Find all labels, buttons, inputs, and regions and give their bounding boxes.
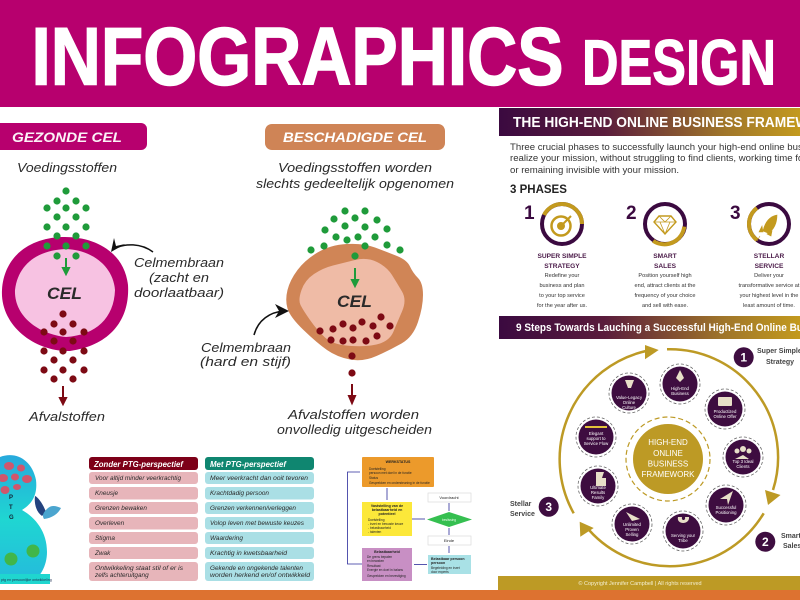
column: with PTG: worden herkend en/of ontwikkeld (210, 572, 310, 579)
cycle arrows (560, 345, 780, 566)
intro paragraph (510, 142, 800, 176)
yellow box: potentieel (379, 512, 395, 516)
center circle: BUSINESS (648, 460, 688, 468)
nine steps: Productized (714, 409, 737, 414)
yellow box: - talenten (368, 530, 382, 534)
phase 1: to your top service (539, 293, 585, 299)
phase 3: SERVICE (755, 263, 784, 270)
column: without PTG: Zwak (94, 550, 111, 557)
yellow box: - belastbaarheid (368, 526, 391, 530)
nine steps: Serving your (671, 533, 696, 538)
column: without PTG: Voor altijd minder veerkrachtig (95, 475, 181, 482)
phase 3: transformative service at (739, 283, 800, 289)
heading: gezonde cel (0, 123, 147, 150)
nine steps: Successful (716, 505, 736, 510)
nine steps: Culture (622, 405, 637, 410)
section header bar 2 (499, 316, 800, 339)
phase 3: Deliver your (754, 273, 784, 279)
orange box: persoon met doel in de functie (369, 471, 412, 475)
column: without PTG: Kneusje (95, 490, 119, 497)
subheading: 3 phases: 3 PHASES (510, 184, 567, 196)
numbered badges: Strategy (766, 359, 794, 366)
blue box: door experts (431, 570, 449, 574)
intro paragraph: or remaining invisible with your mission. (510, 165, 679, 176)
label: cel: CEL (337, 292, 372, 311)
orange box: WERKSTATUS (386, 460, 411, 464)
waste dots (40, 310, 88, 383)
gold footer strip (498, 576, 800, 590)
label: membrane hard: Celmembraan (201, 341, 291, 355)
numbered badges: Stellar (510, 501, 532, 508)
panel: high-end business framework (498, 108, 800, 590)
label: waste: Afvalstoffen (28, 410, 105, 424)
phase 3: STELLAR (754, 253, 784, 260)
nine steps: support to (586, 436, 606, 441)
blue box (428, 555, 471, 574)
label: partial absorption: Voedingsstoffen worden (278, 161, 432, 175)
label: incomplete waste: Afvalstoffen worden (287, 408, 419, 422)
label: incomplete waste: onvolledig uitgescheiden (277, 423, 432, 437)
label: membrane soft: (zacht en (149, 271, 209, 285)
nine steps: Proven (625, 527, 639, 532)
yellow box: Vaststelling van de (371, 504, 403, 508)
green decision diamond: beslissing (442, 518, 456, 522)
heading: beschadigde cel (265, 124, 445, 150)
label: incomplete waste (277, 408, 432, 437)
waste dots (316, 313, 394, 377)
column: without PTG: Ontwikkeling staat stil of er is (95, 565, 184, 572)
arrow: nutrients in (352, 268, 358, 286)
column: with PTG: Grenzen verkennen/verleggen (210, 505, 296, 512)
orange box (362, 457, 434, 487)
label: membrane soft: Celmembraan (134, 256, 224, 270)
nine steps: Business (671, 391, 689, 396)
blue box: persoon (431, 561, 445, 565)
purple box: Gesprekken en bevestiging (367, 574, 406, 578)
numbered badges: 1 (740, 350, 747, 364)
purple box: De grens bepalen (367, 555, 392, 559)
arrow: nutrients in (63, 258, 69, 274)
phase 3: least amount of time. (743, 303, 795, 309)
nine steps: Value-Legacy (616, 395, 643, 400)
column: with PTG (205, 457, 314, 581)
blue box: Begeleiding en inzet (431, 566, 460, 570)
column: with PTG: Met PTG-perspectief (210, 459, 287, 469)
nine steps: Results (591, 490, 605, 495)
gold footer strip: © Copyright Jennifer Campbell | All rights reserved (578, 580, 702, 587)
panel: PTG figure (0, 455, 61, 584)
label: membrane hard: (hard en stijf) (200, 355, 291, 369)
phase 2: and sell with ease. (642, 303, 688, 309)
phase 1 (524, 203, 587, 309)
damaged cell body (286, 244, 423, 360)
column: without PTG: Grenzen bewaken (95, 505, 147, 512)
nine steps: Elegant (589, 431, 604, 436)
nine steps: Online (623, 400, 636, 405)
nine steps: Selling (626, 532, 639, 537)
phase 1: SUPER SIMPLE (537, 253, 587, 260)
heading: gezonde cel: GEZONDE CEL (12, 130, 122, 145)
pointer head (111, 238, 125, 252)
phase 2: frequency of your choice (635, 293, 695, 299)
PTG letters: P (9, 495, 13, 501)
arrow: membrane pointer (114, 245, 153, 252)
column: without PTG: Overleven (95, 520, 125, 527)
outcome box bottom: Einde (444, 538, 455, 543)
nine steps: Top 3 Ideal (732, 459, 754, 464)
numbered badges (510, 347, 800, 552)
label: cel: CEL (47, 284, 82, 303)
phase 2: 2 (626, 203, 637, 224)
nutrient dots (43, 187, 90, 260)
butterfly (35, 496, 61, 519)
orange box: Gesprekken en ondersteuning in de functie (369, 481, 430, 485)
column: without PTG: zelfs achteruitgang (94, 572, 149, 579)
center circle: FRAMEWORK (642, 470, 695, 479)
column: without PTG (89, 457, 198, 581)
column: with PTG: Meer veerkracht dan ooit tevoren (210, 475, 308, 482)
blue box: Belastbaar persoon (431, 557, 465, 561)
arrow: waste out (60, 386, 66, 404)
nine steps: Unlimited (623, 522, 642, 527)
yellow box (362, 502, 412, 536)
panel: healthy cell (0, 123, 224, 424)
flow arrows (348, 472, 449, 564)
nutrient dots (307, 207, 404, 260)
orange box: Status (369, 476, 378, 480)
section header bar (499, 108, 800, 136)
purple box: en bewaken (367, 559, 384, 563)
pointer head (275, 304, 289, 318)
phase 2 (626, 203, 695, 309)
phase 2: SALES (654, 263, 677, 270)
arrow: waste out (349, 384, 355, 403)
orange box: Doelstelling (369, 467, 386, 471)
title: INFOGRAPHICS (32, 12, 564, 102)
yellow box: - inzet en bewuste keuze (368, 522, 403, 526)
phase 3 (730, 203, 800, 309)
heading: beschadigde cel: BESCHADIGDE CEL (283, 130, 427, 145)
phase 1: 1 (524, 203, 535, 224)
yellow box: belastbaarheid en (372, 508, 402, 512)
PTG letters: G (9, 515, 14, 521)
arrow: membrane pointer (254, 311, 284, 335)
center circle: HIGH-END (648, 438, 688, 447)
column: with PTG: Waardering (210, 535, 243, 542)
column: with PTG: Gekende en ongekende talenten (210, 565, 303, 572)
bottom orange strip (0, 590, 800, 600)
panel: PTG comparison table (89, 457, 314, 581)
phase 2: SMART (653, 253, 677, 260)
purple box (362, 548, 412, 581)
PTG letters (9, 495, 14, 521)
phase 3: your highest level in the (740, 293, 798, 299)
column: with PTG: Volop leven met bewuste keuzes (210, 520, 305, 527)
nine steps: Clients (736, 464, 750, 469)
phase 2: end, attract clients at the (635, 283, 695, 289)
cell body (2, 237, 128, 351)
nine steps (576, 364, 763, 551)
panel: flowchart (348, 457, 472, 581)
purple box: Belastbaarheid (374, 550, 400, 554)
nine steps: High-End (671, 386, 690, 391)
bottom caption bar: ptg en persoonlijke ontwikkeling (1, 578, 52, 582)
center circle: ONLINE (653, 449, 683, 458)
nine steps: Positioning (715, 510, 737, 515)
label: partial absorption: slechts gedeeltelijk opgenomen (256, 177, 454, 191)
numbered badges: 3 (545, 500, 552, 514)
label: nutrients: Voedingsstoffen (17, 161, 117, 175)
purple box: Resultaat (367, 564, 381, 568)
phase 2: Position yourself high (638, 273, 692, 279)
nine steps: Service Flow (584, 441, 609, 446)
label: membrane soft: doorlaatbaar) (134, 286, 224, 300)
PTG head silhouette (0, 455, 47, 584)
phase 1: Redefine your (545, 273, 580, 279)
nine steps: Tribe (678, 538, 688, 543)
phase 1: business and plan (539, 283, 585, 289)
center circle (626, 417, 710, 501)
outcome box top: Voordracht (439, 495, 460, 500)
cloud bubbles (0, 462, 32, 494)
PTG letters: T (9, 505, 13, 511)
yellow box: Doelstelling (368, 518, 385, 522)
numbered badges: 2 (762, 535, 769, 549)
phase 1: for the year after us. (537, 303, 587, 309)
phase 3: 3 (730, 203, 741, 224)
column: without PTG: Stigma (95, 535, 115, 542)
phase 1: STRATEGY (544, 263, 580, 270)
panel: damaged cel (200, 124, 454, 437)
label: membrane soft (134, 256, 224, 300)
label: membrane hard (200, 341, 291, 369)
numbered badges: Service (510, 511, 535, 518)
column: with PTG: Krachtdadig persoon (210, 490, 269, 497)
nine steps: Ultimate (590, 485, 606, 490)
purple box: Energie en doel in balans (367, 568, 403, 572)
green circles (4, 544, 40, 566)
header banner (0, 0, 800, 107)
column: with PTG: Krachtig in kwetsbaarheid (210, 550, 287, 557)
column: without PTG: Zonder PTG-perspectief (93, 459, 184, 469)
nine steps: Online Offer (713, 414, 737, 419)
nine steps: Family (592, 495, 605, 500)
label: partial absorption (256, 161, 454, 191)
